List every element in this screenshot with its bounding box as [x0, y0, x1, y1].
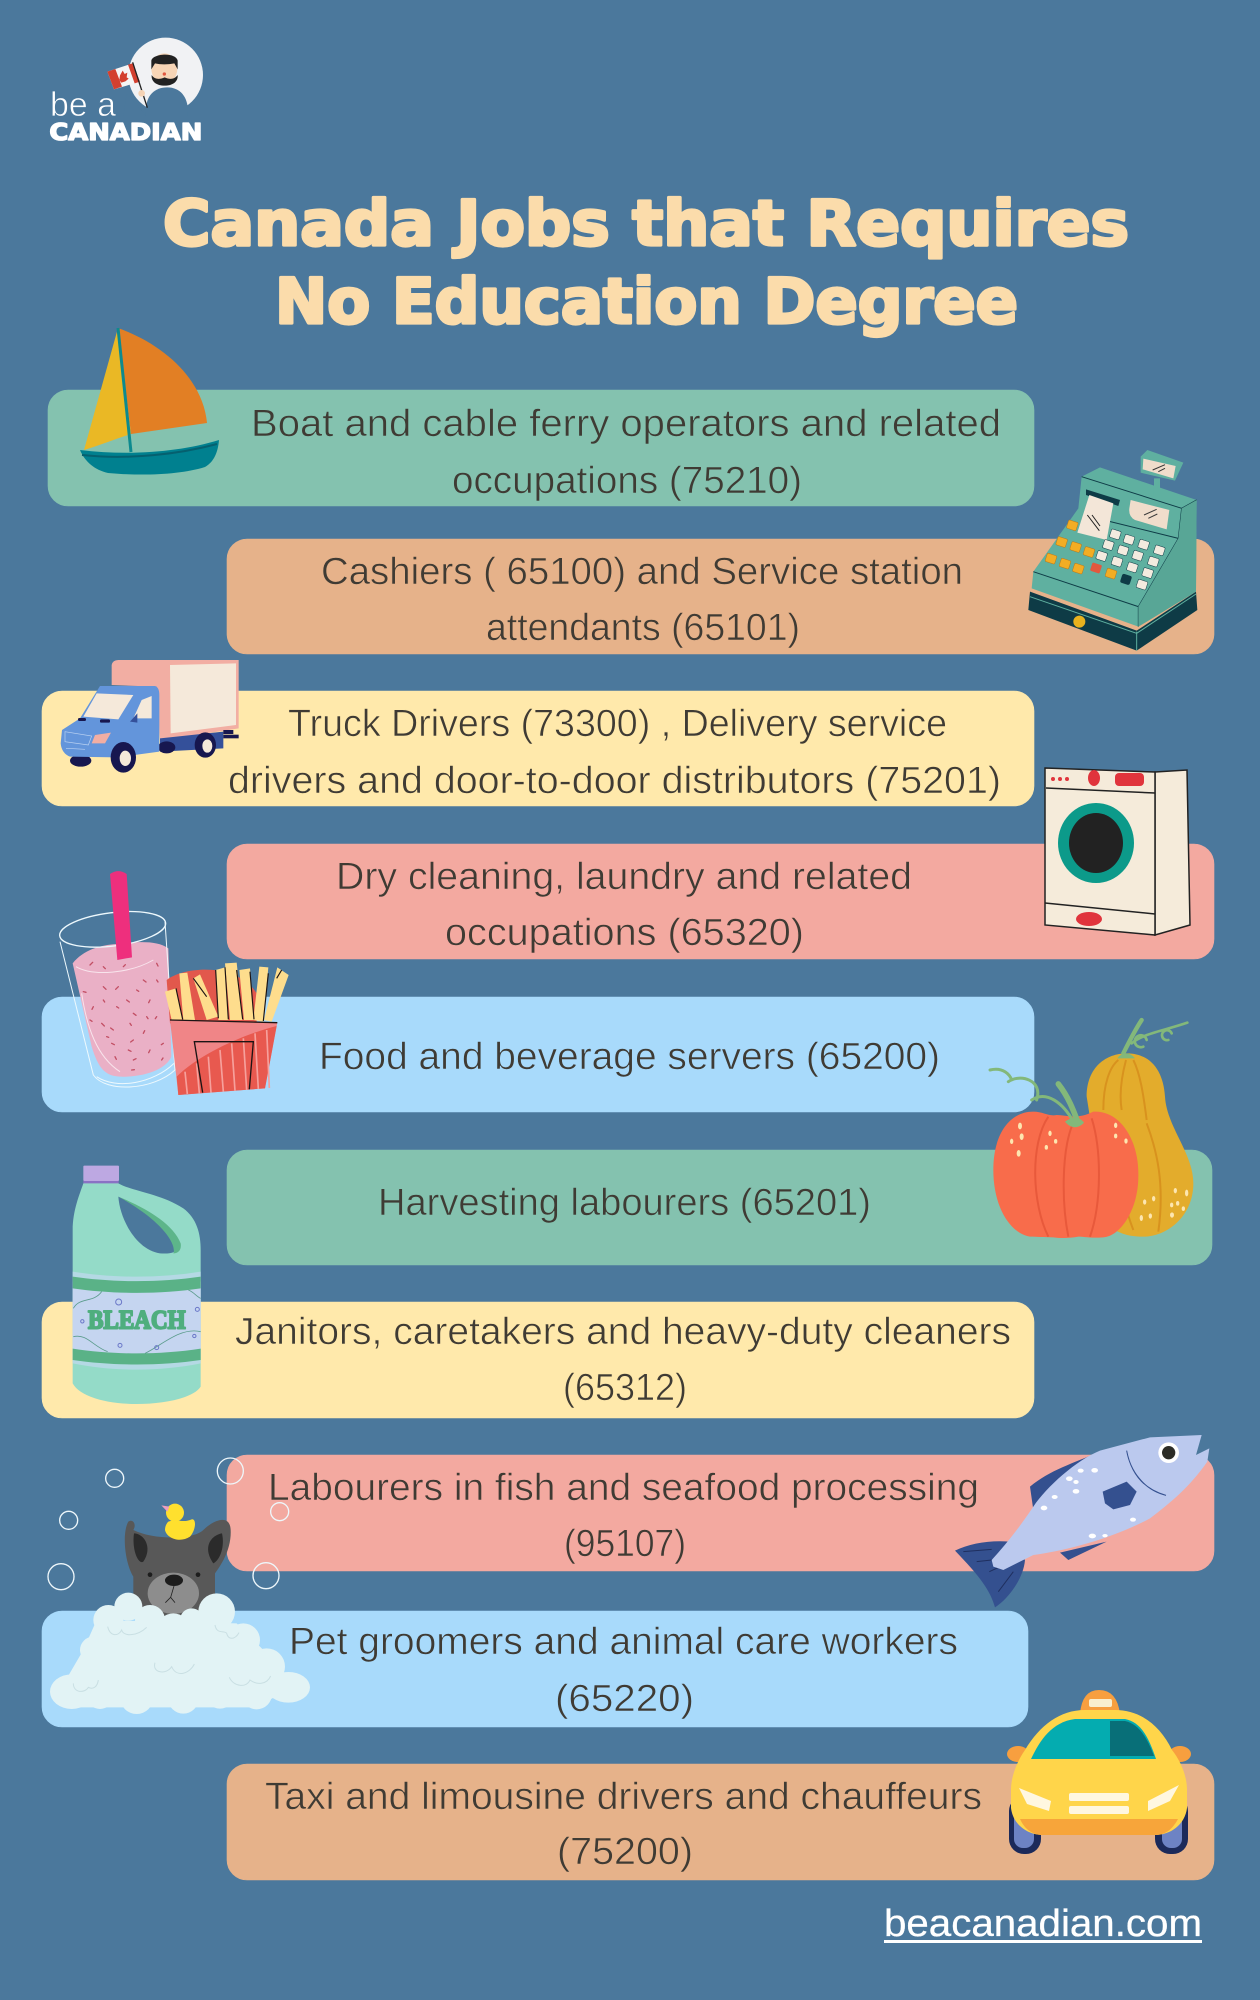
- panel: pet groomers: (65220): [555, 1678, 694, 1720]
- panel: cashiers: [227, 539, 1214, 654]
- icon: fries: [165, 963, 289, 1095]
- panel: truck drivers: [42, 691, 1034, 806]
- title: Canada Jobs that Requires: [163, 187, 1129, 260]
- icon: delivery truck: [61, 660, 239, 773]
- panel: dry cleaning: [227, 844, 1214, 959]
- icon: bleach bottle: BLEACH: [88, 1304, 186, 1334]
- panel: fish and seafood labourers: [227, 1455, 1214, 1571]
- panel: cashiers: attendants (65101): [486, 607, 800, 649]
- panel: boat and cable ferry operators: Boat and cable ferry operators and related: [251, 403, 1001, 445]
- panel: boat and cable ferry operators: [48, 390, 1034, 506]
- icon: cash register: [1028, 450, 1197, 651]
- panel: harvesting labourers: [227, 1150, 1212, 1265]
- panel: taxi drivers: [227, 1764, 1214, 1880]
- panel: fish and seafood labourers: Labourers in fish and seafood processing: [268, 1467, 979, 1509]
- website link: beacanadian.com: [884, 1903, 1202, 1945]
- panel: pet groomers: [42, 1611, 1028, 1727]
- panel: dry cleaning: Dry cleaning, laundry and related: [336, 856, 912, 898]
- icon: bleach bottle: [73, 1166, 201, 1404]
- panel: janitors: [42, 1302, 1034, 1418]
- panel: pet groomers: Pet groomers and animal care workers: [289, 1621, 958, 1663]
- icon: taxi: [1007, 1690, 1191, 1854]
- logo: be a Canadian: be a: [50, 86, 117, 124]
- panel: food and beverage servers: Food and beverage servers (65200): [319, 1036, 940, 1078]
- title: No Education Degree: [275, 265, 1018, 338]
- panel: truck drivers: drivers and door-to-door distributors (75201): [228, 760, 1001, 802]
- logo: be a Canadian: CANADIAN: [49, 120, 202, 146]
- icon: milkshake: [58, 871, 175, 1087]
- title: [163, 187, 1129, 338]
- icon: dog in foam with duck and bubbles: [48, 1458, 310, 1714]
- panel: taxi drivers: Taxi and limousine drivers and chauffeurs: [265, 1776, 982, 1818]
- panel: taxi drivers: (75200): [557, 1831, 693, 1873]
- icon: washing machine: [1045, 768, 1190, 935]
- panel: food and beverage servers: [42, 997, 1034, 1112]
- logo: be a Canadian: [49, 38, 203, 146]
- panel: dry cleaning: occupations (65320): [445, 912, 804, 954]
- panel: boat and cable ferry operators: occupations (75210): [452, 460, 802, 502]
- icon: pumpkins: [990, 1020, 1193, 1238]
- panel: cashiers: Cashiers ( 65100) and Service station: [321, 551, 963, 593]
- icon: sailboat: [80, 328, 219, 475]
- icon: fish: [955, 1435, 1209, 1607]
- panel: harvesting labourers: Harvesting labourers (65201): [378, 1182, 871, 1224]
- panel: fish and seafood labourers: (95107): [564, 1523, 686, 1565]
- panel: janitors: Janitors, caretakers and heavy-duty cleaners: [235, 1311, 1011, 1353]
- panel: truck drivers: Truck Drivers (73300) , Delivery service: [288, 703, 947, 745]
- panel: janitors: (65312): [563, 1367, 687, 1409]
